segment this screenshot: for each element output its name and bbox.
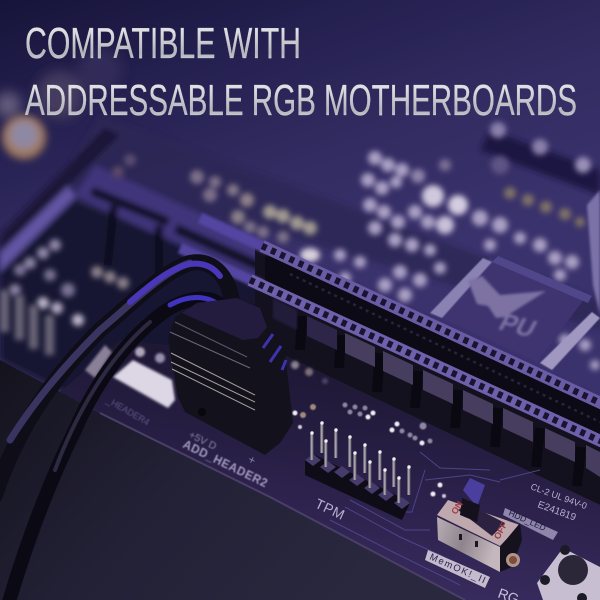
slot rail upper xyxy=(200,218,600,405)
board front strip xyxy=(60,340,600,600)
pale pillar bar right xyxy=(587,190,600,315)
blurred component clusters xyxy=(9,122,600,370)
silk screen labels: ADD_HEADER2 xyxy=(181,439,269,490)
orange bokeh xyxy=(2,115,46,159)
silk screen labels: + xyxy=(246,452,258,468)
circuit traces xyxy=(330,452,540,585)
heading: COMPATIBLE WITH xyxy=(25,19,301,68)
silk screen labels: E241819 xyxy=(536,499,578,524)
pin tips xyxy=(310,421,411,480)
silk screen labels: _HEADER4 xyxy=(104,395,151,427)
MemOK switch xyxy=(437,478,522,572)
far slots and board blurred xyxy=(0,115,600,445)
left pin headers xyxy=(0,290,54,355)
header blocks xyxy=(305,454,410,520)
slot contact squares xyxy=(273,298,600,477)
ARGB connector xyxy=(168,298,293,455)
white fan header xyxy=(85,345,175,408)
header pins xyxy=(310,423,410,503)
slot dark columns xyxy=(300,316,581,486)
cables xyxy=(0,262,233,600)
LED label: HDD_LED xyxy=(507,508,548,533)
expansion slot xyxy=(255,248,600,505)
floor xyxy=(0,360,465,600)
silk screen labels: TPM xyxy=(313,495,348,523)
board small components xyxy=(291,361,446,498)
MemOK switch: ON xyxy=(449,499,465,516)
LED label xyxy=(503,508,558,540)
board edge highlight xyxy=(100,413,465,600)
push button xyxy=(496,545,600,600)
chip: PU xyxy=(494,309,541,343)
silk screen labels xyxy=(104,395,588,524)
chip xyxy=(430,256,600,370)
silk screen labels: CL-2 UL 94V-0 xyxy=(529,481,588,511)
MemOK label: MemOK!_II xyxy=(428,552,487,586)
silk screen labels: +5V D xyxy=(187,429,219,453)
blurred bokeh top left xyxy=(0,48,122,119)
TPM pin header xyxy=(305,421,411,520)
slot rail lower xyxy=(180,248,600,443)
heading xyxy=(25,19,577,125)
MemOK switch: OFF xyxy=(492,520,509,541)
